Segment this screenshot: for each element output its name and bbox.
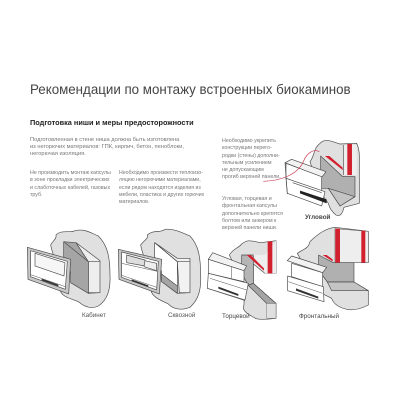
text: insulation: материалов. — [119, 199, 149, 205]
text: insulation — [119, 170, 204, 205]
label: side-mounted: Торцевой — [222, 312, 250, 320]
text: capsule mounting: Угловая, торцевая и — [222, 196, 272, 202]
text: insulation: если рядом находятся изделия из — [119, 185, 201, 191]
text: reinforcement: не допускающим — [222, 167, 264, 173]
text: capsule mounting: фронтальная капсулы — [222, 203, 277, 209]
text: wiring warning — [30, 170, 111, 198]
text: reinforcement: родки (стены) дополни- — [222, 153, 280, 159]
text: niche materials: негорючая изоляция. — [30, 151, 86, 157]
label: cabinet: Кабинет — [82, 312, 106, 318]
title: Рекомендации по монтажу встроенных биокаминов — [30, 81, 351, 97]
text: wiring warning: труб. — [30, 192, 43, 198]
label: corner: Угловой — [305, 214, 330, 220]
text: insulation: Необходимо произвести теплоизо- — [119, 170, 203, 176]
text: wiring warning: и слаботочных кабелей, газовых — [30, 185, 110, 191]
text: niche materials — [30, 136, 184, 157]
diagram: side-mounted — [207, 241, 276, 319]
text: capsule mounting — [222, 196, 283, 231]
diagram: frontal — [287, 227, 368, 310]
arrow: reinforcement pointer — [263, 151, 319, 181]
text: reinforcement — [222, 138, 281, 180]
text: reinforcement: конструкции перего- — [222, 145, 272, 151]
text: reinforcement: прогиб верхней панели. — [222, 174, 281, 180]
label: through: Сквозной — [168, 312, 195, 318]
text: reinforcement: Необходимо укрепить — [222, 138, 276, 144]
text: niche materials: из негорючих материалов: ГПК, кирпич, бетон, пеноблоки, — [30, 144, 184, 150]
text: niche materials: Подготовленная в стене ниша должна быть изготовлена — [30, 136, 179, 142]
diagram: corner — [263, 140, 359, 216]
label: frontal: Фронтальный — [299, 312, 339, 320]
diagram: cabinet — [27, 230, 110, 308]
section heading: Подготовка ниши и меры предосторожности — [30, 118, 194, 127]
text: capsule mounting: болтом или анкером к — [222, 218, 276, 224]
text: wiring warning: в зоне прокладки электрических — [30, 177, 110, 183]
text: capsule mounting: дополнительно крепятся — [222, 211, 283, 217]
text: insulation: мебели, пластика и других горючих — [119, 192, 204, 198]
text: reinforcement: тельным усилением — [222, 160, 272, 166]
text: capsule mounting: верхней панели ниши. — [222, 225, 277, 231]
diagram: through — [118, 229, 201, 309]
text: insulation: ляцию негорючими материалами, — [119, 177, 201, 183]
text: wiring warning: Не производить монтаж капсулы — [30, 170, 111, 176]
